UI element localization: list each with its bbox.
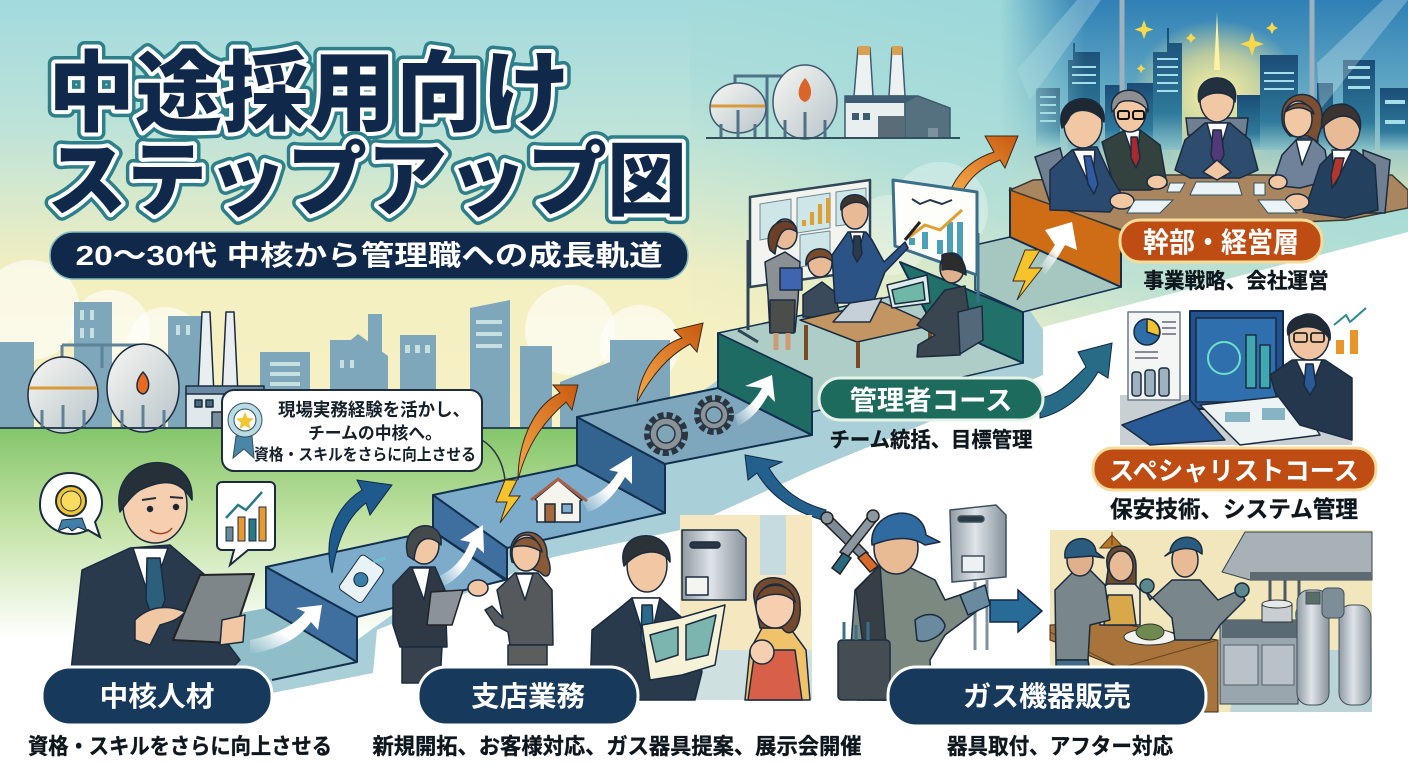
report <box>1128 312 1180 400</box>
executive 2 <box>1102 90 1167 190</box>
mini chart <box>1336 330 1358 354</box>
callout: チームの中核へ。 <box>308 424 442 443</box>
person: branch woman 1 <box>393 526 463 683</box>
background: right sky tint <box>690 0 1408 340</box>
panel: manager course label: チーム統括、目標管理 <box>830 429 1032 452</box>
riser 4 <box>718 333 812 435</box>
seated man <box>917 286 970 357</box>
executive 3 <box>1175 78 1258 180</box>
floor <box>1230 650 1372 712</box>
person: sales man with brochure <box>590 536 725 700</box>
whiteboard right <box>893 180 977 275</box>
icon: gears <box>647 398 731 453</box>
panel: branch work label: 新規開拓、お客様対応、ガス器具提案、展示会開催 <box>372 734 862 759</box>
tread 1 <box>200 608 357 690</box>
arrow: orange 3 <box>952 136 1018 192</box>
callout: 資格・スキルをさらに向上させる <box>254 445 476 464</box>
scene: manager team <box>738 180 983 368</box>
subtitle pill <box>50 232 688 279</box>
arrow: teal to specialist <box>1040 343 1112 418</box>
callout box <box>222 390 482 471</box>
utensils <box>1270 580 1299 612</box>
riser 6 orange <box>1010 188 1121 287</box>
icon: chart bubble <box>217 482 275 565</box>
table papers <box>1127 182 1297 213</box>
person: core talent man <box>70 463 254 700</box>
panel: branch work label <box>372 667 862 759</box>
top right gas plant <box>706 46 960 139</box>
background: clouds <box>0 162 988 385</box>
title line 2 white outline: ステップアップ図 <box>47 137 687 227</box>
riser 2 <box>433 495 507 580</box>
person: branch woman 2 <box>468 532 553 665</box>
icon: tag <box>338 545 391 604</box>
panel: core talent label: 資格・スキルをさらに向上させる <box>28 734 332 759</box>
title line 1: 中途採用向け <box>48 44 570 143</box>
seated woman <box>803 282 840 317</box>
executive 4 <box>1269 94 1330 189</box>
wall water heater <box>950 505 1006 650</box>
desk surface <box>1120 395 1352 445</box>
riser 1 <box>266 567 357 662</box>
panel: gas appliance sales label <box>888 667 1206 759</box>
chairs <box>1035 118 1390 213</box>
subtitle pill: 20〜30代 中核から管理職への成長軌道 <box>76 240 662 271</box>
icon: lightning manager <box>1013 250 1042 300</box>
panel: specialist course label <box>1093 448 1376 522</box>
green ground <box>0 428 900 638</box>
tread 4 <box>577 388 812 464</box>
panel: manager course label <box>819 378 1043 452</box>
callout <box>222 390 505 480</box>
title <box>47 44 687 227</box>
tread 6 <box>975 237 1121 312</box>
executive 5 <box>1285 104 1378 218</box>
scene: specialist <box>1120 308 1366 445</box>
tablet <box>173 574 254 643</box>
hood <box>1222 532 1372 580</box>
staircase <box>200 188 1121 693</box>
customer with apron <box>1100 546 1140 625</box>
board stand <box>976 233 980 303</box>
laptop <box>833 298 882 322</box>
water heater <box>682 530 746 600</box>
scene: restaurant kitchen <box>1050 530 1372 712</box>
lamp <box>1100 532 1124 548</box>
tread 3 <box>433 465 665 548</box>
callout connector <box>482 440 505 480</box>
step shadow band <box>215 300 1043 693</box>
boardroom windows lit <box>1040 58 1405 124</box>
customer woman <box>745 578 810 700</box>
panel: executive label <box>1120 220 1328 293</box>
background: city skyline <box>0 300 670 432</box>
pot <box>1262 605 1292 622</box>
woman with folder <box>765 252 800 332</box>
tread 2 <box>266 531 505 617</box>
arrow: blue to kitchen <box>990 590 1042 632</box>
panel: core talent label: 中核人材 <box>100 681 214 712</box>
title line 2: ステップアップ図 <box>47 137 687 227</box>
panel: branch work label: 支店業務 <box>471 681 585 712</box>
specialist person <box>1270 360 1352 440</box>
callout text: 現場実務経験を活かし、 <box>278 400 470 420</box>
presenter <box>832 232 908 303</box>
table <box>1010 175 1408 230</box>
stove <box>1220 620 1298 704</box>
monitor <box>1190 311 1283 409</box>
panel: executive boardroom <box>1000 0 1408 230</box>
panel: specialist course label: スペシャリストコース <box>1109 456 1359 486</box>
boardroom window view <box>1000 0 1408 190</box>
arrows: white on steps <box>250 222 1077 654</box>
window frames <box>1122 0 1312 100</box>
boardroom window <box>1000 0 1408 190</box>
left gas plant <box>0 312 720 433</box>
technician left <box>1055 539 1110 672</box>
panel: core talent label <box>28 667 332 759</box>
worker <box>838 513 990 700</box>
sparkles <box>1134 20 1278 73</box>
counter <box>1050 622 1218 712</box>
tread 1 front edge <box>272 662 357 680</box>
tread 5 <box>718 293 1023 412</box>
icon: medal bubble <box>40 473 102 537</box>
glow ray <box>1214 12 1220 70</box>
scene: installer worker <box>821 505 1006 700</box>
cylinders <box>1132 372 1141 396</box>
panel: manager course label: 管理者コース <box>850 386 1012 416</box>
desk <box>800 302 933 342</box>
panel: executive label: 幹部・経営層 <box>1143 227 1299 258</box>
whiteboard left <box>750 180 870 287</box>
monitor <box>887 275 930 308</box>
icon: house <box>531 479 587 522</box>
glass diagonal reflections <box>1017 0 1408 110</box>
arrows: orange growth arrows <box>518 136 1018 480</box>
board title scribble <box>912 199 952 204</box>
white lower-right area <box>0 232 1408 768</box>
panel: executive label: 事業戦略、会社運営 <box>1144 269 1328 293</box>
icon: ribbon medal <box>228 403 262 458</box>
riser 5 <box>900 262 1023 363</box>
board cards <box>760 188 866 267</box>
arrow: blue to manager course <box>745 455 826 520</box>
icon: crossed wrenches <box>821 510 879 574</box>
background: sky <box>0 0 1408 440</box>
wall <box>1050 530 1372 712</box>
background: skyline windows <box>80 310 502 386</box>
arrow: orange 2 <box>637 323 703 402</box>
panel: gas appliance sales label: ガス機器販売 <box>963 681 1131 712</box>
icon: lightning step <box>496 480 520 523</box>
arrow: orange 1 <box>518 385 578 480</box>
tablet in hand <box>427 590 463 625</box>
blueprint <box>1122 400 1225 445</box>
riser 3 <box>577 417 665 513</box>
gas cylinders <box>1297 588 1371 705</box>
board legs <box>738 240 758 342</box>
brochure <box>642 605 725 680</box>
panel: specialist course label: 保安技術、システム管理 <box>1110 496 1358 522</box>
title line 1 white outline: 中途採用向け <box>48 44 570 143</box>
arrow: dark blue <box>329 480 392 573</box>
dish <box>1124 629 1176 645</box>
technician right <box>1140 537 1249 640</box>
board chart <box>804 198 828 226</box>
panel: gas appliance sales label: 器具取付、アフター対応 <box>947 734 1173 759</box>
boardroom skyline <box>1036 28 1408 150</box>
scene: customer kitchen <box>680 515 812 700</box>
boardroom glow <box>1136 22 1298 156</box>
executive 1 <box>1050 99 1134 212</box>
